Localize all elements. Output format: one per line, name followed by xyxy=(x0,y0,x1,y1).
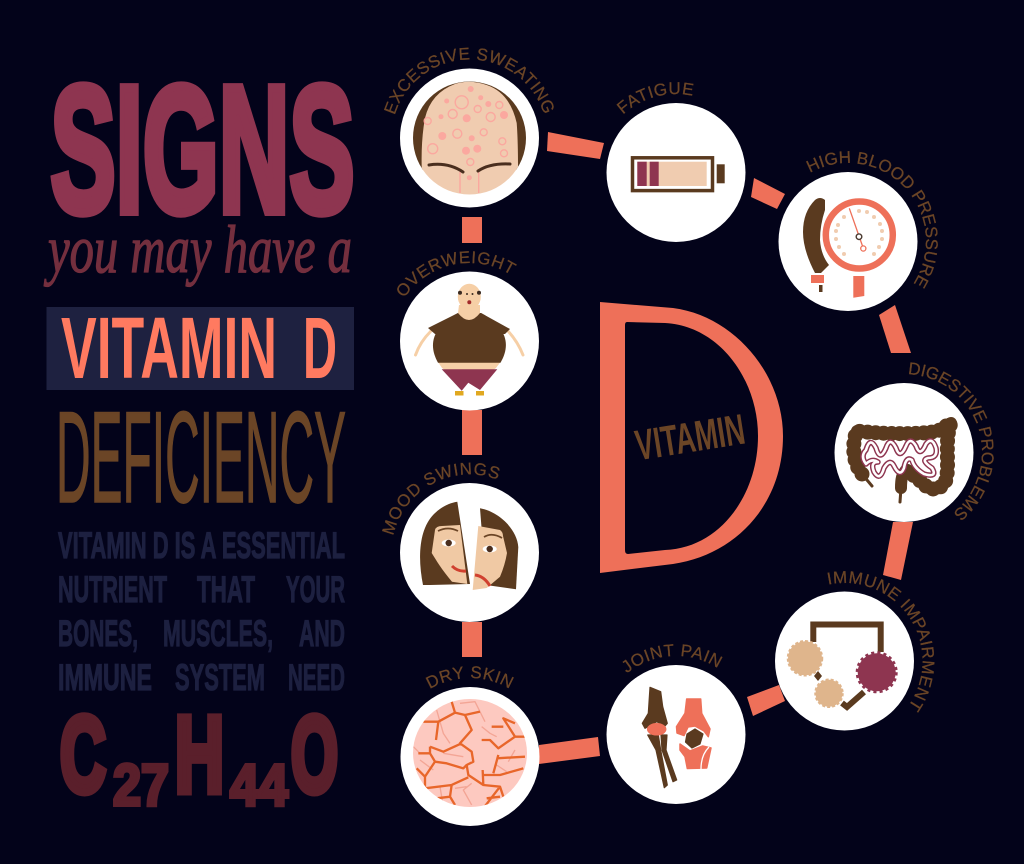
label: fatigue: FATIGUE xyxy=(616,82,694,114)
icon: mood swings faces xyxy=(420,502,518,590)
text block: description: THAT xyxy=(197,569,255,610)
title: SIGNS: SIGNS xyxy=(50,50,354,250)
icon: overweight person xyxy=(416,284,523,396)
label: digestive problems: DIGESTIVE PROBLEMS xyxy=(909,362,994,520)
label: excessive sweating: EXCESSIVE SWEATING xyxy=(384,48,554,114)
chemical formula xyxy=(60,694,338,818)
text block: description: NUTRIENT xyxy=(58,569,167,610)
label: joint pain: JOINT PAIN xyxy=(622,644,722,672)
icon: sweating face xyxy=(413,82,526,194)
chemical formula: C xyxy=(60,694,106,814)
label: immune impairment: IMMUNE IMPAIRMENT xyxy=(828,571,934,713)
chemical formula: 27 xyxy=(113,753,169,818)
text block: description: AND xyxy=(299,613,345,654)
chemical formula: H xyxy=(175,694,224,814)
icon: low battery xyxy=(632,158,725,191)
banner: VITAMIN D: VITAMIN xyxy=(61,300,277,397)
label: dry skin: DRY SKIN xyxy=(426,666,514,688)
icon: dry skin xyxy=(413,699,527,808)
text block: description: SYSTEM xyxy=(175,657,265,698)
banner: VITAMIN D: D xyxy=(303,300,337,397)
label: mood swings: MOOD SWINGS xyxy=(382,462,500,535)
chemical formula: 44 xyxy=(230,753,288,818)
text block: description: BONES, xyxy=(58,613,138,654)
text block: description: MUSCLES, xyxy=(163,613,273,654)
connectors between circles xyxy=(462,132,913,764)
icon: blood pressure gauge xyxy=(803,198,893,298)
text block: description: YOUR xyxy=(286,569,345,610)
icon: immune cells xyxy=(788,624,896,707)
chemical formula: O xyxy=(291,694,338,814)
icon: knee joints xyxy=(642,687,711,788)
centre label: VITAMIN: VITAMIN xyxy=(632,406,748,470)
label: overweight: OVERWEIGHT xyxy=(397,251,517,296)
label: high blood pressure: HIGH BLOOD PRESSURE xyxy=(806,151,938,289)
big letter D xyxy=(600,302,783,573)
icon: intestines xyxy=(854,423,951,502)
text block: description: NEED xyxy=(288,657,345,698)
text block: description: VITAMIN D IS A ESSENTIAL xyxy=(58,525,345,566)
white circles xyxy=(400,68,974,826)
text: DEFICIENCY xyxy=(56,384,346,530)
text block: description xyxy=(58,525,345,698)
subtitle: you may have a: you may have a xyxy=(44,211,352,287)
text block: description: IMMUNE xyxy=(58,657,152,698)
